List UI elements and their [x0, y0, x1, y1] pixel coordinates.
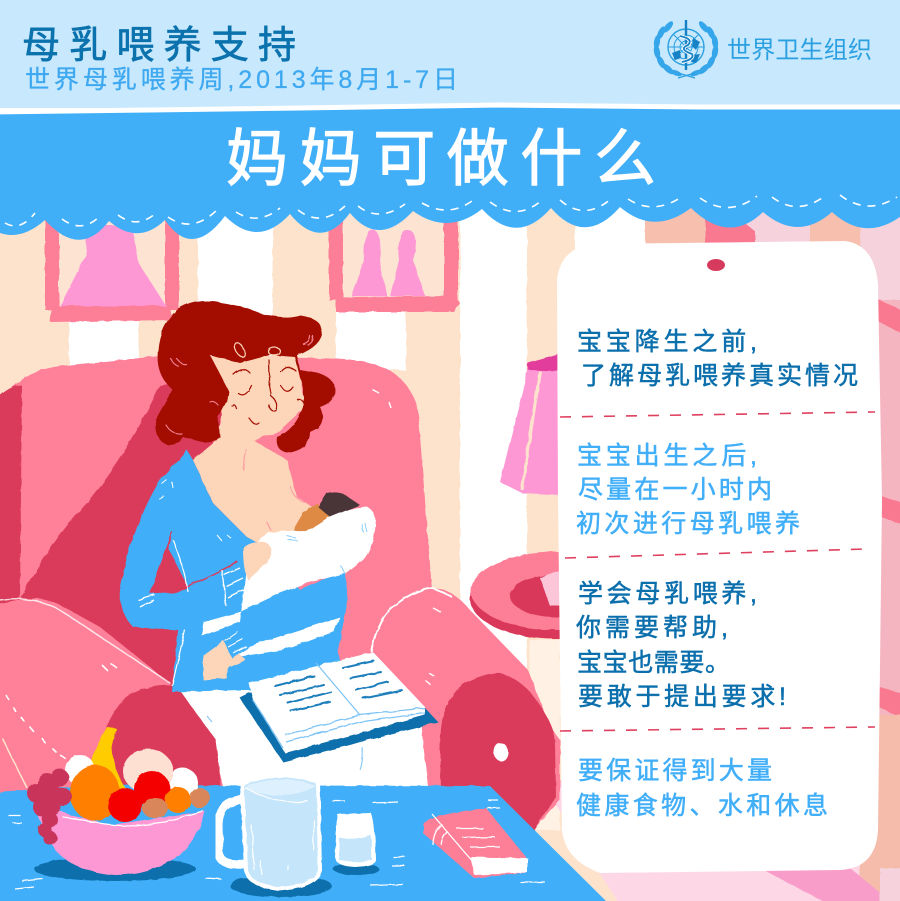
jug handle — [218, 800, 245, 864]
open book — [239, 652, 438, 762]
seat cushion — [178, 680, 428, 786]
glass shadow — [333, 863, 379, 875]
glass — [335, 813, 376, 867]
bowl shadow — [34, 857, 196, 881]
blanket lower fold — [228, 617, 340, 658]
brown fruits — [142, 798, 168, 818]
baby face — [293, 503, 330, 532]
armrest button — [494, 743, 508, 761]
text block 1: 宝宝降生之前, — [577, 328, 757, 356]
bowl — [36, 811, 205, 875]
closed red book — [423, 808, 528, 878]
water jug — [218, 775, 332, 897]
text block 3: 宝宝也需要。 — [577, 649, 730, 677]
red apple front — [108, 788, 142, 822]
text block 2: 宝宝出生之后, — [577, 442, 757, 470]
logo text: WHO name: 世界卫生组织 — [727, 37, 872, 64]
panel: notice card — [557, 241, 882, 873]
text block 4 — [576, 757, 828, 820]
sleeve seam — [150, 532, 238, 593]
chair back — [0, 356, 560, 835]
awning — [0, 0, 900, 240]
heading: campaign title: 母乳喂养支持 — [22, 25, 296, 67]
text block 3 — [576, 580, 786, 711]
window: middle with two curtains — [329, 215, 460, 312]
panel: room background — [0, 205, 900, 901]
staff and serpent — [685, 20, 687, 70]
right armrest front — [440, 673, 556, 834]
text block 4: 要保证得到大量 — [578, 757, 772, 785]
globe — [668, 29, 704, 65]
side table — [470, 552, 642, 639]
text block 1: 了解母乳喂养真实情况 — [581, 362, 858, 390]
mother's lower hand — [203, 640, 246, 680]
logo: WHO emblem — [653, 20, 719, 78]
continents — [672, 38, 700, 63]
baby blanket — [202, 507, 376, 636]
text block 3: 要敢于提出要求! — [578, 683, 786, 711]
table top — [0, 785, 610, 901]
peach — [123, 749, 173, 793]
small orange — [165, 787, 191, 813]
left armrest — [0, 599, 225, 795]
wreath — [653, 20, 719, 78]
skin: chest, neck, face — [193, 356, 312, 545]
text block 2: 初次进行母乳喂养 — [576, 510, 800, 538]
pin — [707, 259, 725, 271]
window: left with pink curtain — [45, 215, 179, 322]
jug body — [242, 775, 320, 889]
awning stitching — [5, 195, 897, 226]
text block 4: 健康食物、水和休息 — [576, 792, 828, 820]
text block 3: 你需要帮助, — [576, 614, 728, 642]
armrest stitching — [6, 663, 117, 758]
chair shadow behind body — [20, 370, 240, 700]
under-arm gap — [150, 532, 188, 593]
awning body — [0, 106, 900, 240]
book cover — [239, 692, 438, 762]
left armrest front — [94, 685, 220, 786]
text block 2: 尽量在一小时内 — [578, 476, 772, 504]
text block 1 — [577, 328, 858, 390]
subheading: world breastfeeding week: 世界母乳喂养周,2013年8月1-7日 — [25, 66, 458, 94]
fruit bowl — [27, 727, 210, 881]
water glass — [333, 813, 379, 875]
book pages — [249, 652, 425, 753]
face details — [166, 336, 313, 530]
jug shadow — [230, 875, 332, 897]
book spine — [253, 663, 425, 748]
chair highlights — [373, 390, 441, 685]
floor lamp — [500, 354, 560, 495]
mother and baby — [120, 301, 376, 692]
heading: main title: 妈妈可做什么 — [226, 125, 656, 194]
white fruits — [65, 755, 95, 785]
banana — [91, 727, 130, 800]
armchair — [0, 356, 560, 835]
grapes — [27, 769, 72, 845]
mother's upper hand — [243, 542, 271, 580]
text block 2 — [576, 442, 800, 538]
dashed divider lines — [560, 412, 875, 731]
red apple back — [134, 771, 170, 807]
orange — [70, 765, 120, 821]
hair — [155, 301, 335, 453]
right armrest — [370, 588, 555, 790]
baby hair — [318, 492, 360, 517]
text block 3: 学会母乳喂养, — [578, 580, 757, 608]
top header band — [0, 0, 900, 108]
book text lines — [275, 661, 402, 711]
chair shadow left — [0, 385, 22, 605]
sweater — [120, 450, 348, 692]
